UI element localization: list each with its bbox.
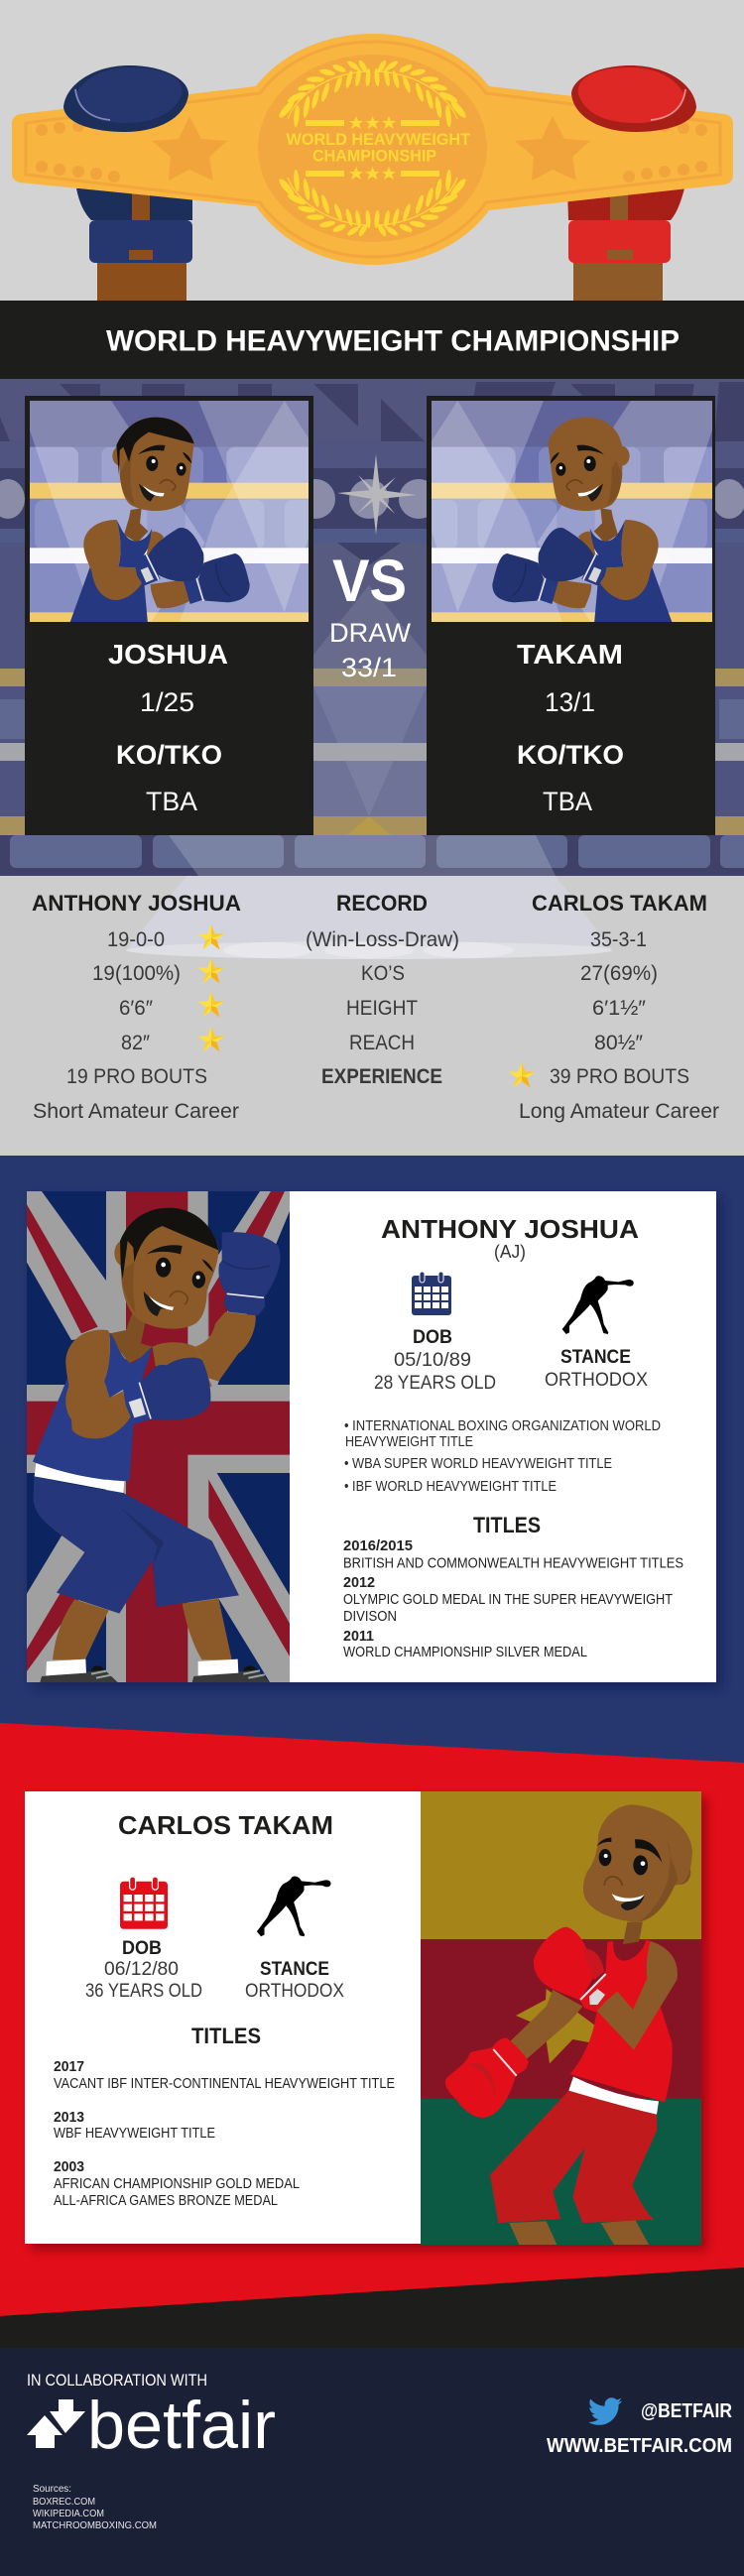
date of birth: DOB bbox=[413, 1327, 452, 1348]
belt title: CHAMPIONSHIP bbox=[312, 147, 436, 165]
red glove bbox=[571, 65, 696, 132]
titles history: DIVISON bbox=[343, 1608, 397, 1625]
panel: stats comparison bbox=[0, 876, 744, 1156]
titles history: ALL-AFRICA GAMES BRONZE MEDAL bbox=[54, 2192, 278, 2209]
background: red section bbox=[0, 1723, 744, 2316]
Joshua name bbox=[381, 1214, 639, 1262]
footer credits bbox=[27, 2371, 732, 2531]
website: WWW.BETFAIR.COM bbox=[547, 2435, 732, 2457]
current titles list: • INTERNATIONAL BOXING ORGANIZATION WORLD bbox=[344, 1417, 661, 1434]
title banner bbox=[0, 301, 744, 379]
titles history: OLYMPIC GOLD MEDAL IN THE SUPER HEAVYWEIGHT bbox=[343, 1591, 673, 1608]
stats rows: HEIGHT bbox=[346, 997, 418, 1020]
Takam odds text: TBA bbox=[543, 787, 592, 816]
stats rows: 27(69%) bbox=[580, 962, 658, 985]
date of birth bbox=[85, 1938, 202, 2002]
titles history: 2012 bbox=[343, 1574, 375, 1591]
illustration: Takam full figure bbox=[445, 1804, 692, 2245]
Takam odds text: 13/1 bbox=[545, 687, 595, 717]
stats rows: 19-0-0 bbox=[107, 928, 165, 951]
sources: MATCHROOMBOXING.COM bbox=[33, 2519, 157, 2531]
belt ornament bars and stars bbox=[306, 116, 439, 180]
titles history: 2016/2015 bbox=[343, 1537, 413, 1554]
stats rows bbox=[33, 928, 719, 1123]
stats headings: CARLOS TAKAM bbox=[532, 891, 707, 916]
date of birth: 36 YEARS OLD bbox=[85, 1981, 202, 2002]
collaboration label: IN COLLABORATION WITH bbox=[27, 2371, 207, 2390]
date of birth: 06/12/80 bbox=[104, 1959, 179, 1980]
date of birth: DOB bbox=[122, 1938, 162, 1959]
Joshua odds text: TBA bbox=[146, 787, 197, 816]
versus and draw odds: VS bbox=[332, 548, 407, 614]
date of birth: 05/10/89 bbox=[394, 1350, 471, 1371]
panel: arena background bbox=[0, 379, 744, 876]
belt illustration with gloves bbox=[12, 34, 733, 301]
stats rows: 80½″ bbox=[594, 1032, 644, 1054]
stance: ORTHODOX bbox=[245, 1981, 344, 2002]
title banner: WORLD HEAVYWEIGHT CHAMPIONSHIP bbox=[106, 325, 680, 357]
stats rows: (Win-Loss-Draw) bbox=[306, 928, 459, 951]
panel: Carlos Takam profile bbox=[25, 1791, 707, 2251]
belt body bbox=[12, 34, 733, 265]
stats headings: RECORD bbox=[336, 891, 428, 916]
background: blue section bbox=[0, 1156, 744, 1771]
illustration: Cameroon flag bbox=[421, 1791, 701, 2245]
wreath bbox=[277, 60, 468, 237]
arm: red fighter bbox=[567, 188, 684, 301]
icon: flash sparkle bbox=[337, 454, 417, 535]
stance bbox=[245, 1959, 344, 2002]
stats rows: Long Amateur Career bbox=[519, 1100, 719, 1123]
stance: STANCE bbox=[560, 1347, 631, 1368]
versus and draw odds: DRAW bbox=[329, 618, 412, 648]
titles history: WBF HEAVYWEIGHT TITLE bbox=[54, 2125, 215, 2142]
stance: ORTHODOX bbox=[545, 1370, 648, 1391]
current titles list bbox=[344, 1417, 661, 1495]
illustration: Joshua portrait bbox=[30, 401, 309, 622]
date of birth: 28 YEARS OLD bbox=[374, 1373, 496, 1394]
stats rows: 82″ bbox=[121, 1032, 151, 1054]
icon: boxer silhouette bbox=[257, 1876, 331, 1936]
versus and draw odds bbox=[329, 548, 412, 682]
titles heading: TITLES bbox=[191, 2024, 261, 2048]
belt title: WORLD HEAVYWEIGHT bbox=[286, 130, 471, 149]
arm: blue fighter bbox=[76, 188, 192, 301]
Joshua odds text: KO/TKO bbox=[116, 740, 222, 770]
sources: WIKIPEDIA.COM bbox=[33, 2508, 104, 2519]
stats headings: ANTHONY JOSHUA bbox=[32, 891, 241, 916]
belt title bbox=[286, 130, 471, 165]
stats headings bbox=[32, 891, 707, 916]
titles history bbox=[343, 1537, 683, 1660]
panel: Anthony Joshua profile bbox=[27, 1191, 722, 1688]
versus and draw odds: 33/1 bbox=[341, 653, 397, 682]
current titles list: • WBA SUPER WORLD HEAVYWEIGHT TITLE bbox=[344, 1455, 612, 1472]
Joshua odds text: JOSHUA bbox=[108, 639, 228, 670]
icon: calendar bbox=[412, 1272, 451, 1315]
titles history: BRITISH AND COMMONWEALTH HEAVYWEIGHT TITLES bbox=[343, 1555, 683, 1571]
titles heading: TITLES bbox=[473, 1513, 541, 1537]
illustration: Joshua full figure bbox=[33, 1208, 280, 1682]
titles history: 2017 bbox=[54, 2058, 84, 2075]
icon: winner stars bbox=[198, 924, 536, 1087]
illustration: union flag bbox=[27, 1191, 290, 1682]
Takam name: CARLOS TAKAM bbox=[118, 1810, 333, 1840]
stats rows: 19 PRO BOUTS bbox=[66, 1065, 207, 1088]
Joshua name: ANTHONY JOSHUA bbox=[381, 1214, 639, 1244]
background: footer bbox=[0, 2348, 744, 2576]
panel: Joshua odds card bbox=[23, 396, 320, 835]
date of birth bbox=[374, 1327, 496, 1394]
stats rows: KO’S bbox=[361, 962, 405, 985]
panel: Takam odds card bbox=[422, 396, 719, 835]
belt dots bbox=[36, 120, 707, 183]
titles history: AFRICAN CHAMPIONSHIP GOLD MEDAL bbox=[54, 2175, 300, 2192]
Takam odds text bbox=[517, 639, 624, 816]
titles history: 2013 bbox=[54, 2109, 84, 2126]
sources: Sources: bbox=[33, 2483, 71, 2495]
titles history: WORLD CHAMPIONSHIP SILVER MEDAL bbox=[343, 1644, 587, 1660]
stats rows: 35-3-1 bbox=[590, 928, 647, 951]
background: hero area bbox=[0, 0, 744, 301]
titles history: 2003 bbox=[54, 2158, 84, 2175]
stats rows: 19(100%) bbox=[92, 962, 181, 985]
social handle: @BETFAIR bbox=[641, 2400, 732, 2422]
illustration: Takam portrait bbox=[422, 398, 719, 629]
current titles list: • IBF WORLD HEAVYWEIGHT TITLE bbox=[344, 1478, 557, 1495]
stats rows: REACH bbox=[349, 1032, 415, 1054]
stats rows: 6′1½″ bbox=[592, 997, 647, 1020]
sources: BOXREC.COM bbox=[33, 2496, 95, 2508]
betfair logo: betfair bbox=[87, 2388, 276, 2463]
titles history bbox=[54, 2058, 395, 2209]
stats rows: EXPERIENCE bbox=[321, 1065, 442, 1088]
icon: calendar bbox=[120, 1877, 168, 1929]
stats rows: 39 PRO BOUTS bbox=[550, 1065, 689, 1088]
stats rows: 6′6″ bbox=[119, 997, 154, 1020]
stance bbox=[545, 1347, 648, 1391]
Takam odds text: KO/TKO bbox=[517, 740, 624, 770]
titles history: VACANT IBF INTER-CONTINENTAL HEAVYWEIGHT TITLE bbox=[54, 2075, 395, 2092]
blue glove bbox=[63, 65, 188, 132]
stance: STANCE bbox=[260, 1959, 329, 1980]
titles history: 2011 bbox=[343, 1628, 374, 1645]
sources bbox=[33, 2483, 157, 2531]
stats rows: Short Amateur Career bbox=[33, 1100, 239, 1123]
belt medal inner bbox=[26, 42, 720, 257]
belt side stars bbox=[152, 116, 590, 181]
Joshua odds text: 1/25 bbox=[140, 687, 194, 717]
Joshua name: (AJ) bbox=[494, 1242, 526, 1262]
icon: twitter bird bbox=[588, 2397, 622, 2425]
current titles list: HEAVYWEIGHT TITLE bbox=[345, 1433, 473, 1450]
background: dark band bbox=[0, 2268, 744, 2348]
Joshua odds text bbox=[108, 639, 228, 816]
Takam odds text: TAKAM bbox=[517, 639, 623, 670]
icon: boxer silhouette bbox=[562, 1276, 634, 1334]
